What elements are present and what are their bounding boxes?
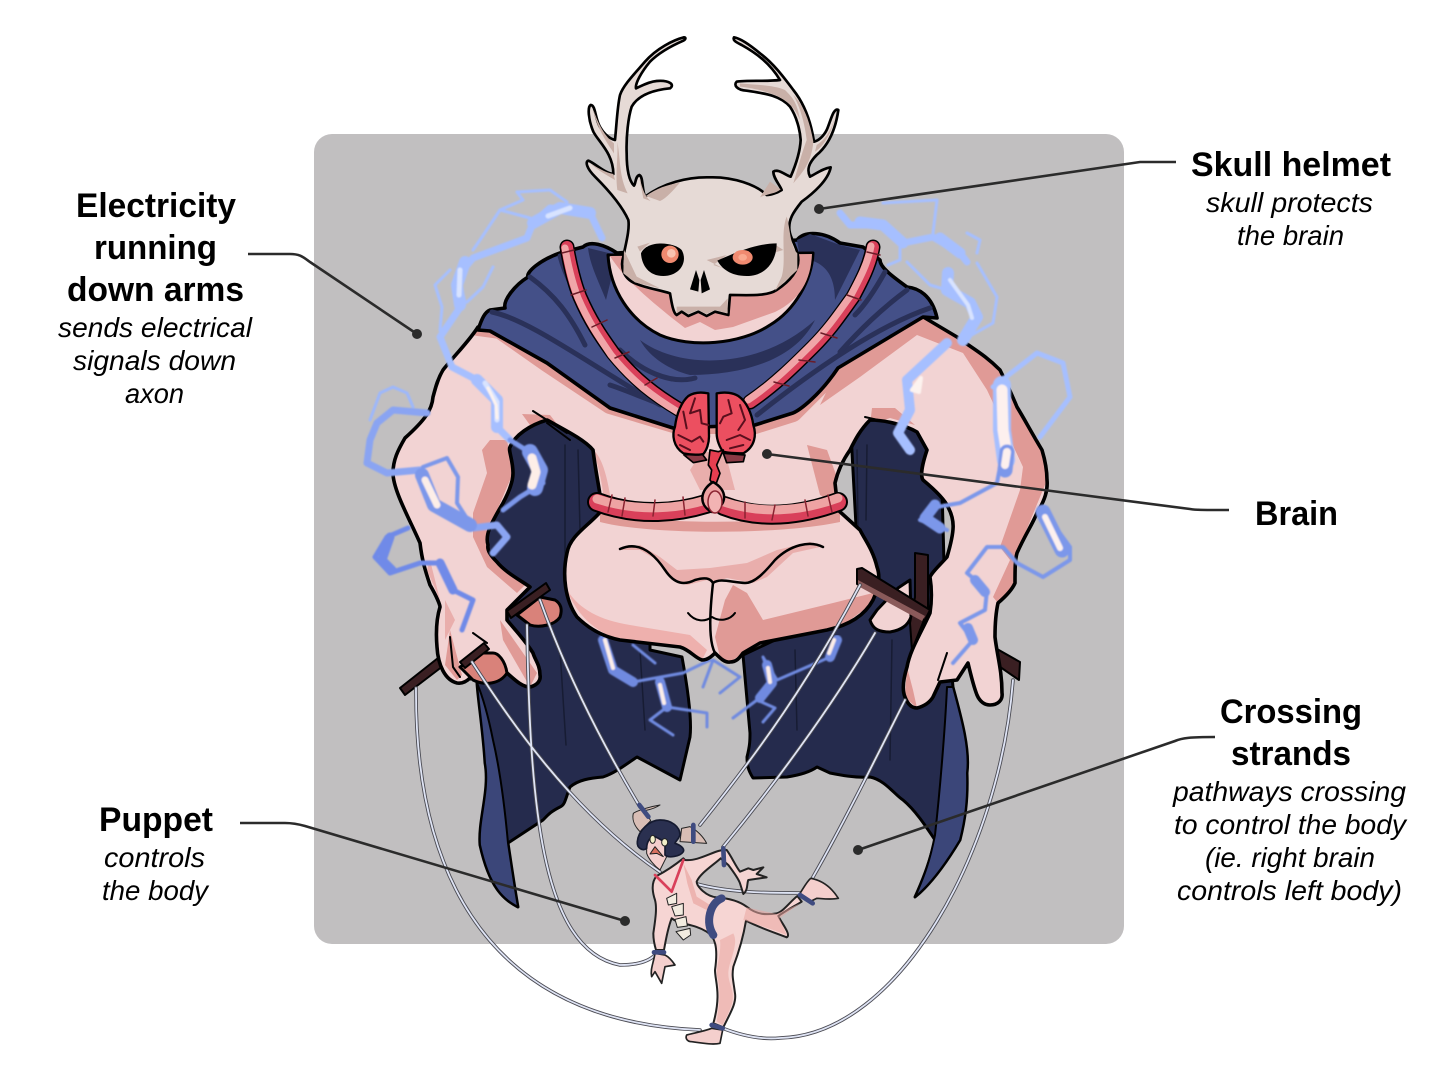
- label: skull helmet: Skull helmet: [1191, 146, 1391, 184]
- upper cape / hood: [478, 234, 937, 428]
- label: puppet: the body: [102, 875, 210, 906]
- label: crossing strands: pathways crossing: [1172, 776, 1406, 807]
- callout leader: crossing strands: [853, 737, 1215, 855]
- callout leader: puppet: [240, 823, 630, 926]
- callout leader: brain: [762, 449, 1229, 510]
- puppet figure: [633, 805, 838, 1044]
- callout leader: skull helmet: [814, 162, 1176, 214]
- lightning on the right arm: [840, 200, 1070, 663]
- rope nerves on cape: [562, 246, 880, 412]
- label: crossing strands: to control the body: [1174, 809, 1408, 840]
- grey background panel: [314, 134, 1124, 944]
- label: electricity running down arms: down arms: [67, 271, 244, 309]
- palm under left crossbar: [460, 653, 507, 683]
- label: crossing strands: strands: [1231, 735, 1351, 773]
- callout leader: electricity: [248, 254, 422, 339]
- lightning under the belly: [603, 640, 837, 735]
- crossbars, right hand: [857, 553, 930, 650]
- label: skull helmet: skull protects: [1206, 187, 1373, 218]
- label: electricity running down arms: [58, 187, 253, 409]
- label: electricity running down arms: signals down: [73, 345, 236, 376]
- label: skull helmet: the brain: [1237, 220, 1344, 251]
- label: crossing strands: [1172, 693, 1408, 906]
- crossbars, left hand: [460, 583, 550, 668]
- thumb behind left crossbar: [517, 597, 561, 626]
- crossbar end, left hand: [400, 658, 443, 695]
- label: electricity running down arms: running: [94, 229, 217, 267]
- skull helmet with antlers: [587, 37, 838, 316]
- label: electricity running down arms: sends electrical: [58, 312, 253, 343]
- label: skull helmet: [1191, 146, 1391, 251]
- label: crossing strands: controls left body): [1177, 875, 1402, 906]
- lightning on the left arm: [367, 190, 602, 630]
- lower cape, right side: [743, 415, 968, 897]
- label: crossing strands: Crossing: [1220, 693, 1362, 731]
- lower cape, left side: [470, 415, 691, 907]
- rope belt with knot: [597, 482, 838, 520]
- pink neck: [608, 253, 813, 343]
- label: puppet: controls: [104, 842, 205, 873]
- puppet strings: [416, 585, 1013, 1038]
- label: brain: Brain: [1255, 495, 1338, 533]
- label: puppet: Puppet: [99, 801, 213, 839]
- crossbar end, right hand: [990, 645, 1020, 680]
- thumb, right hand: [870, 580, 911, 632]
- label: crossing strands: (ie. right brain: [1205, 842, 1375, 873]
- panel: puppet master illustration: [367, 37, 1070, 1044]
- giant body and arms: [393, 300, 1047, 708]
- label: electricity running down arms: axon: [125, 378, 184, 409]
- label: electricity running down arms: Electricity: [76, 187, 236, 225]
- brain: [673, 393, 755, 487]
- label: puppet: [99, 801, 213, 906]
